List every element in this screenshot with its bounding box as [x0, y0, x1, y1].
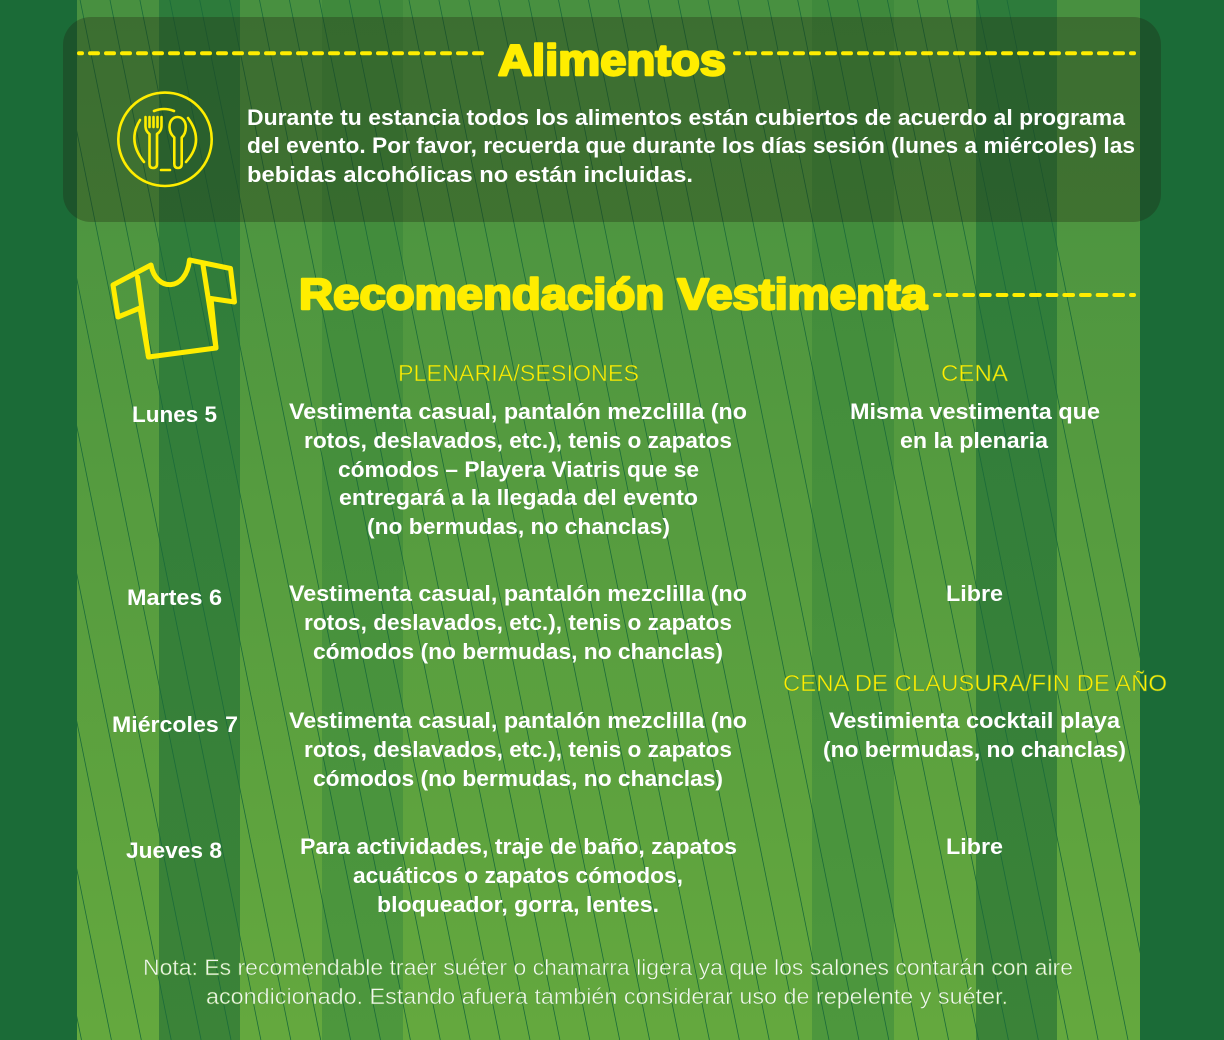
- icon: plate with fork and spoon: [118, 93, 212, 186]
- row: miércoles 7: Vestimenta casual, pantalón mezclilla (no: [289, 708, 747, 733]
- row: miércoles 7: cómodos (no bermudas, no chanclas): [313, 766, 723, 791]
- row: lunes 5: Lunes 5: [132, 402, 217, 427]
- row: miércoles 7: Miércoles 7: [112, 712, 238, 737]
- row: lunes 5: Misma vestimenta que: [850, 399, 1100, 424]
- row: lunes 5: Vestimenta casual, pantalón mezclilla (no: [289, 399, 747, 424]
- row: miércoles 7: [112, 708, 1126, 791]
- icon: t-shirt: [113, 260, 234, 357]
- row: jueves 8: bloqueador, gorra, lentes.: [377, 892, 659, 917]
- text block: alimentos: bebidas alcohólicas no están incluidas.: [247, 162, 693, 187]
- text block: alimentos: del evento. Por favor, recuerda que durante los días sesión (lunes a miércoles) las: [247, 133, 1135, 158]
- row: martes 6: rotos, deslavados, etc.), tenis o zapatos: [304, 610, 732, 635]
- column heading: cena: CENA: [941, 360, 1009, 386]
- row: miércoles 7: (no bermudas, no chanclas): [823, 737, 1126, 762]
- note: Nota: Es recomendable traer suéter o chamarra ligera ya que los salones contarán con aire: [143, 955, 1073, 980]
- row: martes 6: [127, 581, 1003, 664]
- column heading: cena de clausura: CENA DE CLAUSURA/FIN DE AÑO: [783, 670, 1167, 696]
- row: lunes 5: rotos, deslavados, etc.), tenis o zapatos: [304, 428, 732, 453]
- row: lunes 5: en la plenaria: [900, 428, 1048, 453]
- row: martes 6: Libre: [946, 581, 1003, 606]
- row: jueves 8: Jueves 8: [126, 838, 222, 863]
- row: lunes 5: [132, 399, 1100, 539]
- heading: alimentos with dashed rules: Alimentos: [498, 37, 726, 85]
- row: miércoles 7: rotos, deslavados, etc.), tenis o zapatos: [304, 737, 732, 762]
- text block: alimentos: Durante tu estancia todos los alimentos están cubiertos de acuerdo al programa: [247, 105, 1125, 130]
- row: lunes 5: entregará a la llegada del evento: [339, 485, 698, 510]
- row: lunes 5: cómodos – Playera Viatris que se: [338, 457, 699, 482]
- row: miércoles 7: Vestimienta cocktail playa: [829, 708, 1121, 733]
- column heading: plenaria/sesiones: PLENARIA/SESIONES: [398, 360, 639, 386]
- row: jueves 8: Libre: [946, 834, 1003, 859]
- row: jueves 8: [126, 834, 1003, 917]
- note: acondicionado. Estando afuera también considerar uso de repelente y suéter.: [206, 984, 1008, 1009]
- row: jueves 8: Para actividades, traje de baño, zapatos: [300, 834, 737, 859]
- row: martes 6: Martes 6: [127, 585, 222, 610]
- row: jueves 8: acuáticos o zapatos cómodos,: [353, 863, 683, 888]
- row: lunes 5: (no bermudas, no chanclas): [367, 514, 670, 539]
- text block: alimentos: [247, 105, 1135, 187]
- row: martes 6: Vestimenta casual, pantalón mezclilla (no: [289, 581, 747, 606]
- note: [143, 955, 1073, 1009]
- row: martes 6: cómodos (no bermudas, no chanclas): [313, 639, 723, 664]
- panel: alimentos: [63, 17, 1161, 222]
- heading: recomendación vestimenta with dashed rule: Recomendación Vestimenta: [299, 271, 928, 319]
